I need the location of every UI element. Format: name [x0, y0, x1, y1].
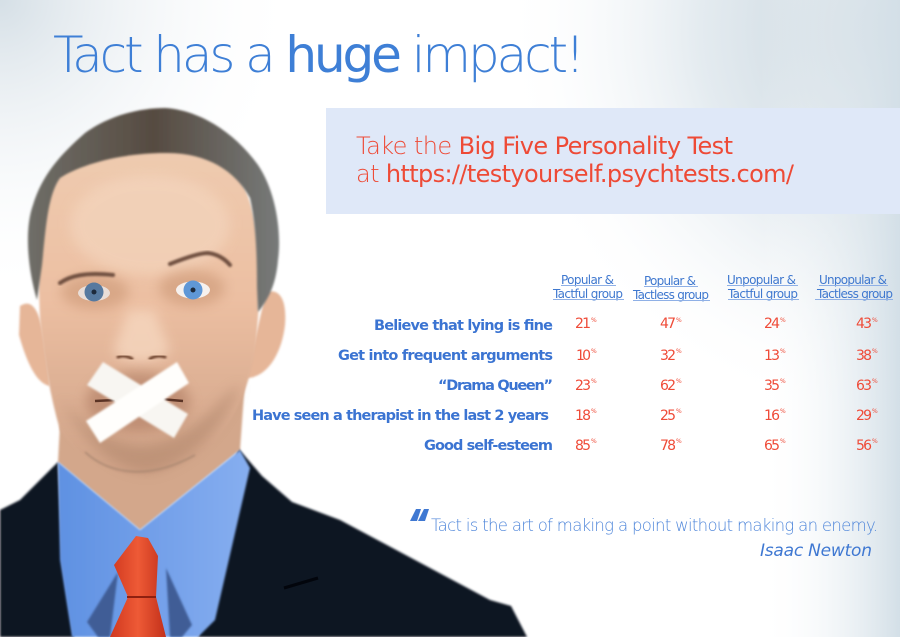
row: good self-esteem: 78 — [660, 438, 676, 454]
row: good self-esteem: % — [872, 438, 878, 445]
row: get into frequent arguments — [338, 348, 878, 364]
row: get into frequent arguments: % — [872, 348, 878, 355]
row: good self-esteem — [424, 438, 878, 454]
row: get into frequent arguments: 38 — [856, 348, 872, 364]
eyes — [78, 285, 110, 301]
row: drama queen: 23 — [575, 378, 591, 394]
ears — [19, 291, 285, 386]
row: good self-esteem: 85 — [575, 438, 591, 454]
quote attribution: Isaac Newton — [760, 541, 872, 561]
row: have seen a therapist: 16 — [764, 408, 780, 424]
row: have seen a therapist: % — [872, 408, 878, 415]
row: have seen a therapist — [252, 408, 878, 424]
table: survey results by group — [252, 273, 893, 454]
tape X — [86, 362, 189, 443]
row: believe that lying is fine: 21 — [575, 316, 591, 332]
row: get into frequent arguments: % — [591, 348, 597, 355]
column header: popular and tactful: Tactful group — [552, 287, 623, 301]
column header: popular and tactless: Tactless group — [632, 288, 709, 302]
row: get into frequent arguments: Get into frequent arguments — [338, 348, 553, 364]
panel: test invitation — [326, 108, 900, 214]
row: have seen a therapist: % — [676, 408, 682, 415]
lapel notch — [284, 578, 318, 588]
row: believe that lying is fine: % — [591, 317, 597, 324]
row: believe that lying is fine: 43 — [856, 316, 872, 332]
row: good self-esteem: % — [780, 438, 786, 445]
neck — [58, 380, 245, 530]
face — [38, 125, 260, 475]
row: drama queen: “Drama Queen” — [438, 378, 553, 394]
text: test invitation line 1: Take the Big Five Personality Test — [356, 132, 733, 160]
row: drama queen: % — [872, 378, 878, 385]
title: Tact has a huge impact! — [53, 26, 585, 84]
text: test invitation line 2: at https://testyourself.psychtests.com/ — [356, 160, 795, 188]
row: believe that lying is fine: Believe that lying is fine — [374, 318, 553, 334]
hair — [28, 108, 279, 312]
suit — [0, 448, 527, 637]
row: get into frequent arguments: 10 — [576, 348, 591, 364]
row: have seen a therapist: % — [780, 408, 786, 415]
column header: unpopular and tactful — [727, 273, 799, 301]
row: good self-esteem: 65 — [764, 438, 780, 454]
row: believe that lying is fine: % — [872, 317, 878, 324]
column header: unpopular and tactful: Tactful group — [727, 287, 798, 301]
row: believe that lying is fine: 47 — [660, 316, 676, 332]
row: get into frequent arguments: % — [780, 348, 786, 355]
row: believe that lying is fine: % — [780, 317, 786, 324]
row: drama queen: % — [591, 378, 597, 385]
row: believe that lying is fine: 24 — [764, 316, 780, 332]
row: have seen a therapist: % — [591, 408, 597, 415]
row: believe that lying is fine — [374, 316, 878, 334]
row: good self-esteem: 56 — [856, 438, 872, 454]
forehead highlight — [70, 175, 230, 275]
illustration: man with taped mouth — [0, 108, 527, 637]
row: drama queen: % — [780, 378, 786, 385]
row: good self-esteem: % — [676, 438, 682, 445]
row: get into frequent arguments: % — [676, 348, 682, 355]
column header: popular and tactful: Popular & — [561, 273, 614, 287]
row: have seen a therapist: Have seen a therapist in the last 2 years — [252, 408, 549, 424]
row: drama queen — [438, 378, 878, 394]
row: good self-esteem: % — [591, 438, 597, 445]
row: drama queen: % — [676, 378, 682, 385]
row: drama queen: 62 — [660, 378, 676, 394]
row: have seen a therapist: 18 — [575, 408, 591, 424]
row: good self-esteem: Good self-esteem — [424, 438, 553, 454]
row: drama queen: 63 — [856, 378, 872, 394]
row: have seen a therapist: 29 — [856, 408, 872, 424]
shirt — [58, 450, 250, 637]
lips — [95, 399, 183, 401]
column header: popular and tactless: Popular & — [644, 274, 696, 288]
column header: unpopular and tactless — [815, 273, 893, 301]
nose — [114, 310, 170, 362]
column header: unpopular and tactless: Tactless group — [816, 287, 893, 301]
eyebrows — [60, 253, 230, 283]
eye shadows — [61, 275, 129, 309]
row: believe that lying is fine: % — [676, 317, 682, 324]
column header: popular and tactful — [552, 273, 624, 301]
row: drama queen: 35 — [764, 378, 780, 394]
row: get into frequent arguments: 32 — [660, 348, 676, 364]
row: get into frequent arguments: 13 — [764, 348, 780, 364]
nostrils — [118, 356, 165, 359]
column header: unpopular and tactful: Unpopular & — [727, 273, 796, 287]
column header: popular and tactless — [632, 274, 710, 302]
chin line — [85, 452, 195, 472]
collar shadow — [87, 568, 192, 637]
row: have seen a therapist: 25 — [660, 408, 676, 424]
mouth shadow — [86, 372, 190, 432]
tie — [110, 536, 166, 637]
quote text: Tact is the art of making a point without making an enemy. — [431, 516, 878, 535]
quote mark icon — [410, 509, 429, 521]
column header: unpopular and tactless: Unpopular & — [819, 273, 887, 287]
stubble — [62, 385, 240, 472]
